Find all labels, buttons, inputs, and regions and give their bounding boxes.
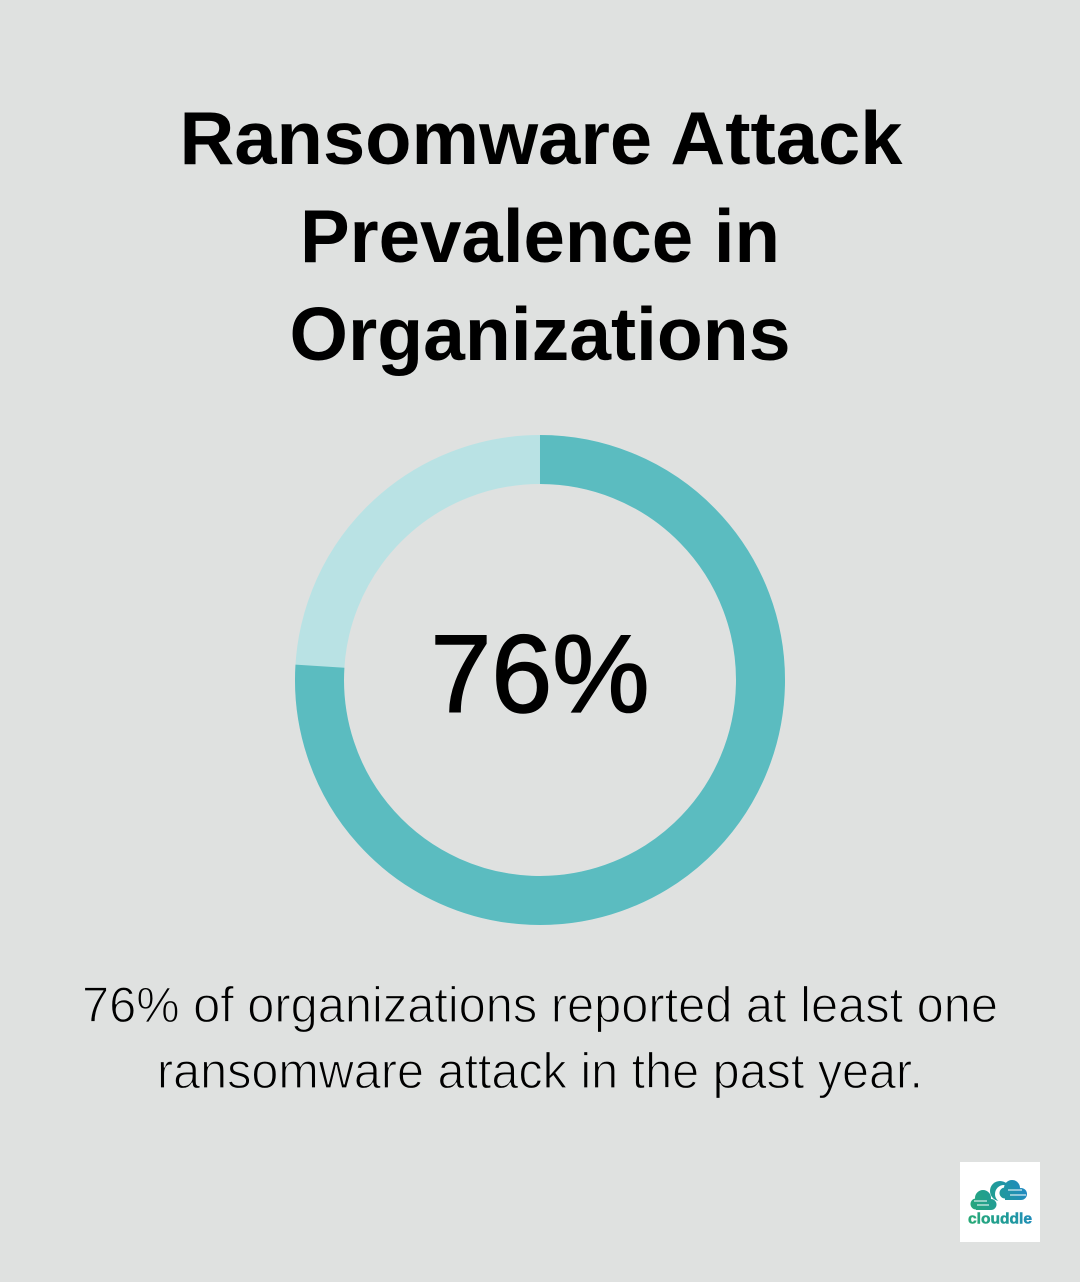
icon: clouds: [970, 1180, 1027, 1210]
description text: 76% of organizations reported at least one: [82, 977, 998, 1033]
logo wordmark: clouddle: [968, 1210, 1032, 1228]
title: Ransomware Attack: [180, 96, 903, 180]
logo: clouddle: [960, 1162, 1040, 1242]
description text: [82, 977, 998, 1099]
center value: 76%: [430, 613, 650, 736]
description text: ransomware attack in the past year.: [157, 1043, 923, 1099]
title: Organizations: [290, 292, 790, 376]
title: Prevalence in: [300, 194, 780, 278]
title: [180, 96, 903, 376]
donut chart: 76%: [320, 460, 761, 900]
